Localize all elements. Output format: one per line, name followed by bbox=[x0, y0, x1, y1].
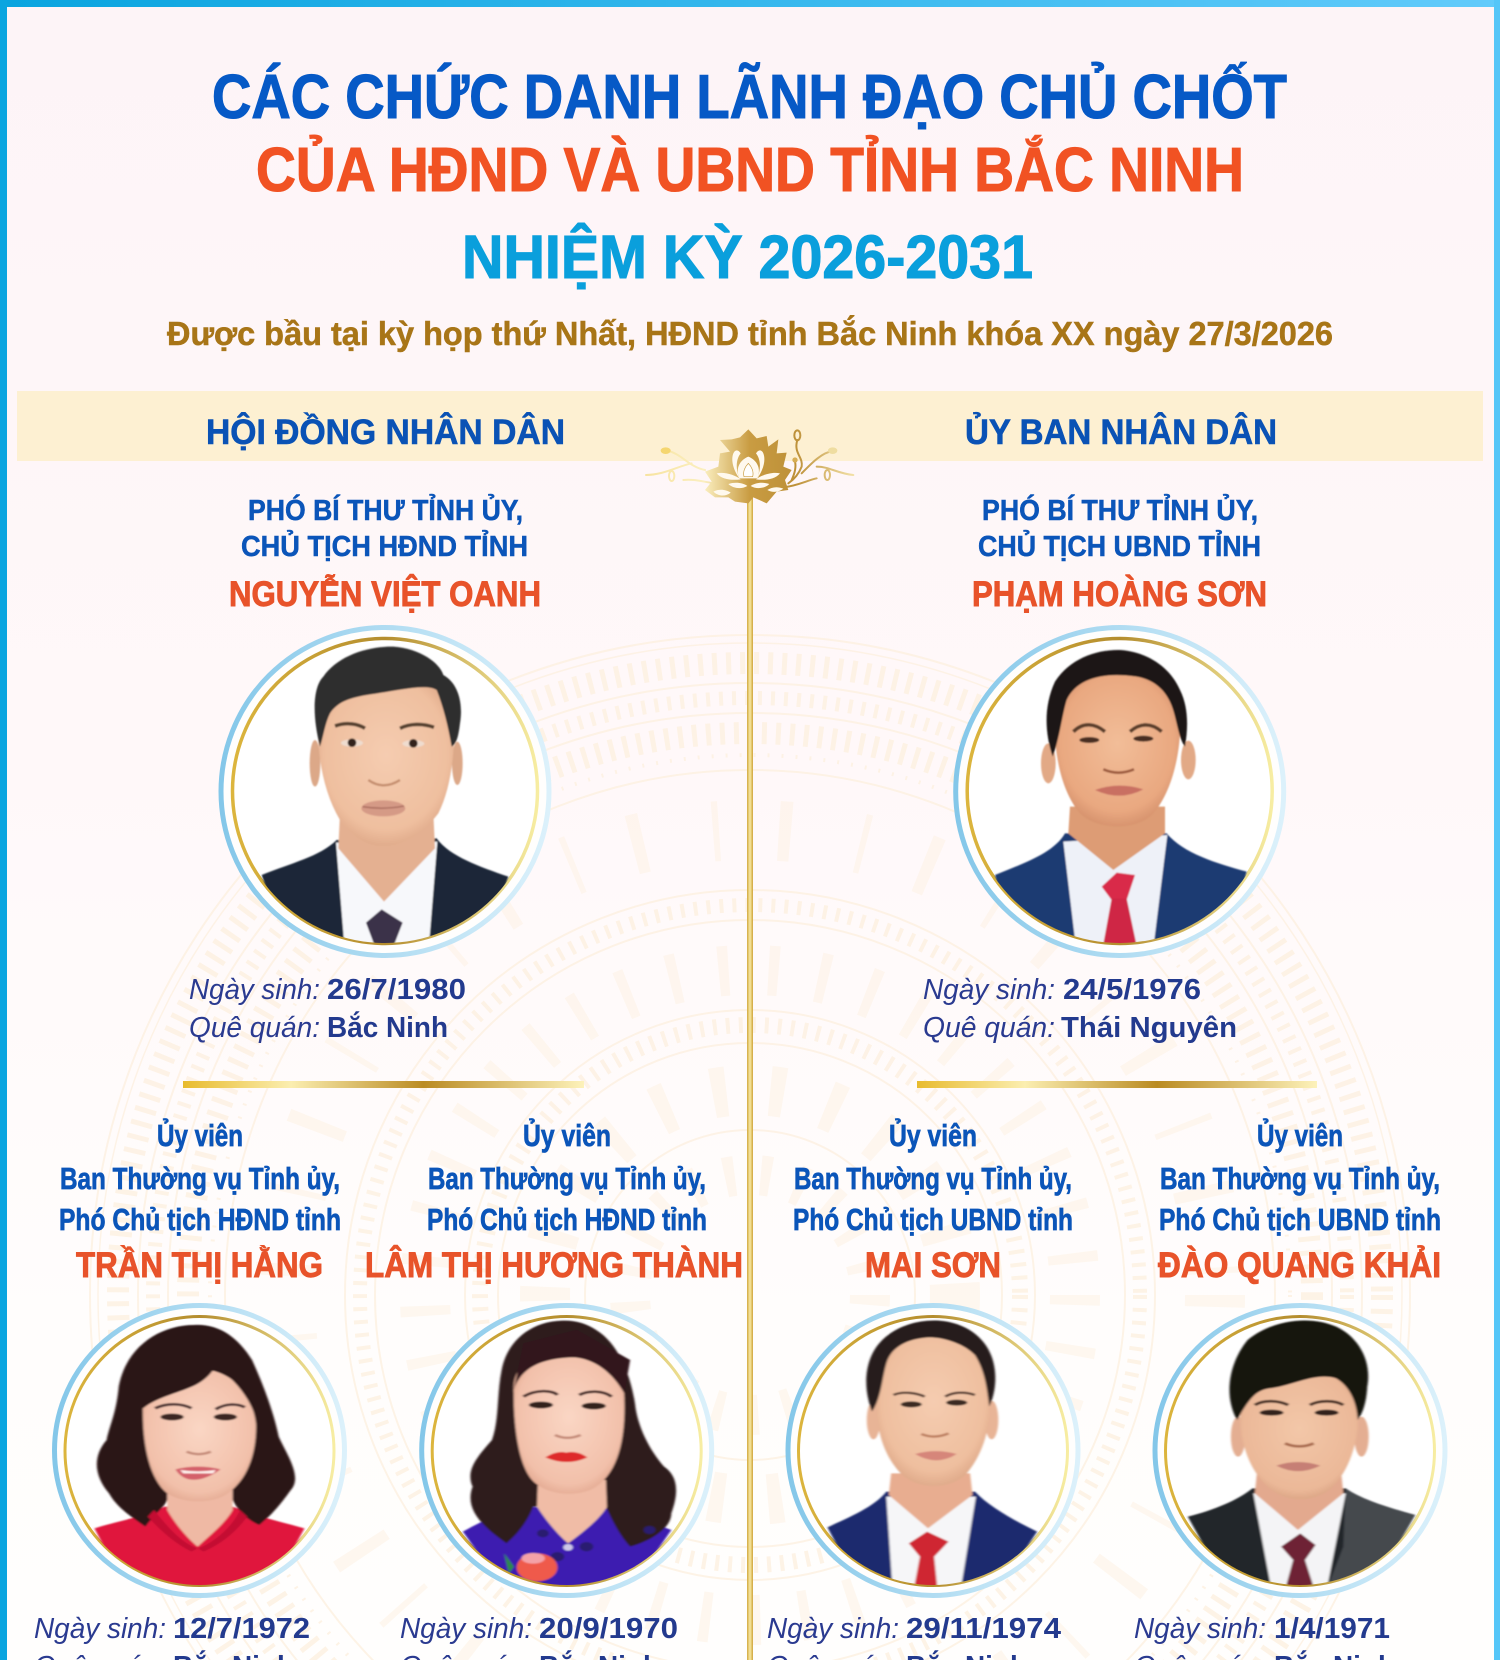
position title bbox=[978, 493, 1261, 563]
portrait circle bbox=[1155, 1306, 1445, 1596]
position title bbox=[427, 1117, 707, 1237]
birth date and hometown: 26/7/1980 bbox=[327, 974, 466, 1006]
title: CÁC CHỨC DANH LÃNH ĐẠO CHỦ CHỐT bbox=[212, 63, 1287, 132]
panel: Đào Quang Khải bbox=[1134, 1117, 1445, 1660]
portrait circle bbox=[422, 1306, 712, 1596]
position title: Ủy viên bbox=[523, 1117, 611, 1153]
panel: Lâm Thị Hương Thành bbox=[365, 1117, 743, 1660]
birth date and hometown: 12/7/1972 bbox=[173, 1613, 310, 1645]
birth date and hometown bbox=[400, 1613, 678, 1660]
birth date and hometown: Ngày sinh: bbox=[34, 1613, 166, 1645]
position title bbox=[793, 1117, 1073, 1237]
name: PHẠM HOÀNG SƠN bbox=[972, 574, 1267, 614]
panel: HĐND chairman bbox=[189, 493, 549, 1044]
portrait circle bbox=[788, 1306, 1078, 1596]
divider: right bbox=[917, 1081, 1317, 1088]
birth date and hometown bbox=[923, 974, 1237, 1044]
birth date and hometown: Bắc Ninh bbox=[327, 1010, 448, 1044]
birth date and hometown: Thái Nguyên bbox=[1061, 1012, 1237, 1044]
icon: gold lotus bbox=[646, 429, 853, 503]
birth date and hometown: Ngày sinh: bbox=[400, 1613, 532, 1645]
position title: PHÓ BÍ THƯ TỈNH ỦY, bbox=[982, 493, 1258, 527]
birth date and hometown: Quê quán: bbox=[923, 1012, 1055, 1044]
birth date and hometown bbox=[767, 1613, 1061, 1660]
position title: Ban Thường vụ Tỉnh ủy, bbox=[794, 1161, 1072, 1196]
panel: UBND chairman bbox=[923, 493, 1284, 1044]
position title: CHỦ TỊCH HĐND TỈNH bbox=[241, 529, 528, 563]
birth date and hometown: Quê quán: bbox=[189, 1012, 320, 1044]
name: ĐÀO QUANG KHẢI bbox=[1158, 1245, 1441, 1285]
birth date and hometown bbox=[1134, 1613, 1395, 1660]
birth date and hometown: 24/5/1976 bbox=[1063, 974, 1201, 1006]
position title: Ủy viên bbox=[1257, 1117, 1343, 1153]
birth date and hometown: Ngày sinh: bbox=[923, 974, 1055, 1006]
position title: Ủy viên bbox=[889, 1117, 977, 1153]
heading: HĐND: HỘI ĐỒNG NHÂN DÂN bbox=[206, 412, 565, 452]
portrait circle bbox=[54, 1306, 344, 1596]
section header band bbox=[17, 391, 1483, 461]
center gold line bbox=[747, 498, 753, 1660]
birth date and hometown bbox=[34, 1613, 310, 1660]
divider: left bbox=[183, 1081, 584, 1088]
position title: Ban Thường vụ Tỉnh ủy, bbox=[60, 1161, 340, 1196]
position title: Phó Chủ tịch HĐND tỉnh bbox=[427, 1202, 707, 1237]
birth date and hometown: 1/4/1971 bbox=[1274, 1613, 1390, 1645]
birth date and hometown: Ngày sinh: bbox=[1134, 1613, 1266, 1645]
name: TRẦN THỊ HẰNG bbox=[76, 1245, 323, 1285]
portrait circle bbox=[956, 628, 1284, 956]
panel: Mai Sơn bbox=[767, 1117, 1078, 1660]
birth date and hometown bbox=[189, 974, 466, 1044]
position title: Ủy viên bbox=[157, 1117, 243, 1153]
birth date and hometown: Ngày sinh: bbox=[189, 974, 320, 1006]
position title: PHÓ BÍ THƯ TỈNH ỦY, bbox=[248, 493, 523, 527]
position title bbox=[59, 1117, 341, 1237]
panel: Trần Thị Hằng bbox=[34, 1117, 344, 1660]
position title: Ban Thường vụ Tỉnh ủy, bbox=[428, 1161, 706, 1196]
birth date and hometown: Ngày sinh: bbox=[767, 1613, 899, 1645]
name: LÂM THỊ HƯƠNG THÀNH bbox=[365, 1245, 743, 1285]
birth date and hometown: 20/9/1970 bbox=[539, 1613, 678, 1645]
position title: Phó Chủ tịch UBND tỉnh bbox=[793, 1202, 1073, 1237]
subtitle: Được bầu tại kỳ họp thứ Nhất, HĐND tỉnh Bắc Ninh khóa XX ngày 27/3/2026 bbox=[167, 315, 1333, 352]
position title: Phó Chủ tịch HĐND tỉnh bbox=[59, 1202, 341, 1237]
background: faint bronze drum pattern bbox=[90, 635, 1410, 1660]
name: NGUYỄN VIỆT OANH bbox=[229, 574, 541, 614]
birth date and hometown: 29/11/1974 bbox=[906, 1613, 1061, 1645]
name: MAI SƠN bbox=[865, 1246, 1001, 1285]
position title bbox=[241, 493, 528, 563]
title bbox=[212, 63, 1287, 291]
position title bbox=[1159, 1117, 1441, 1237]
position title: CHỦ TỊCH UBND TỈNH bbox=[978, 529, 1261, 563]
heading: UBND: ỦY BAN NHÂN DÂN bbox=[965, 412, 1277, 452]
portrait circle bbox=[221, 628, 549, 956]
title: NHIỆM KỲ 2026-2031 bbox=[462, 223, 1033, 291]
title: CỦA HĐND VÀ UBND TỈNH BẮC NINH bbox=[256, 136, 1244, 205]
